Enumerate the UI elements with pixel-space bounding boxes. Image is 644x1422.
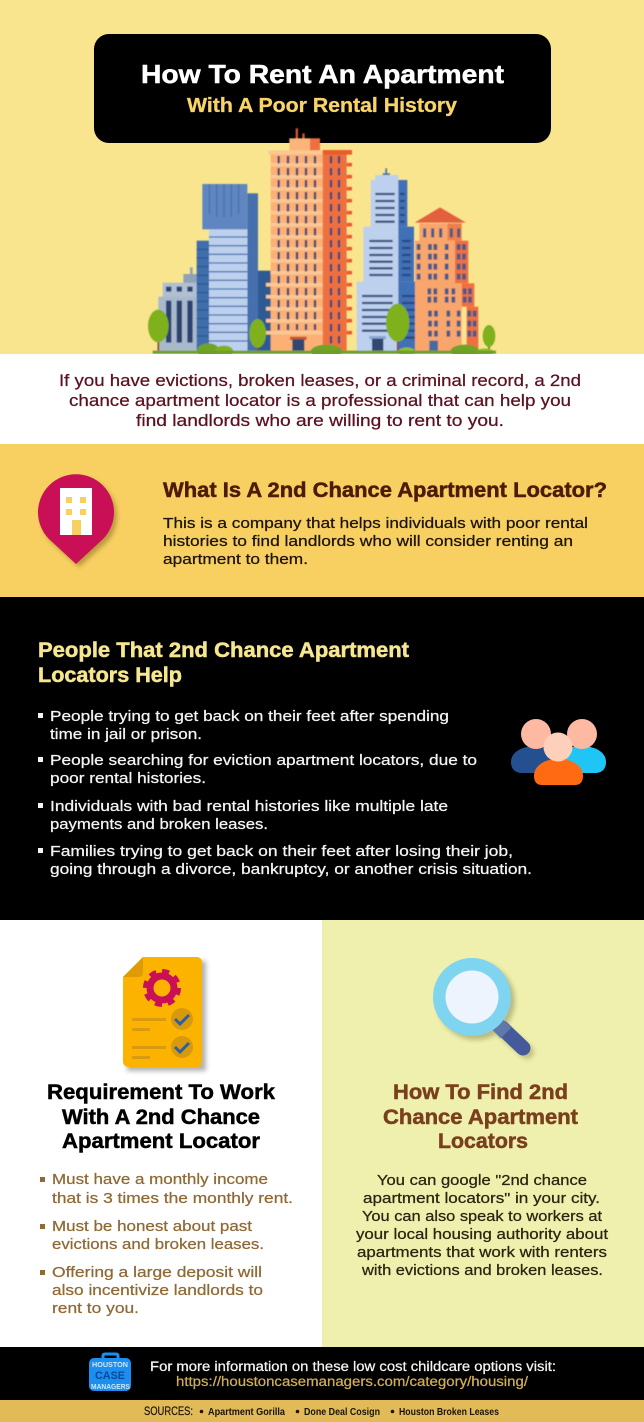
footer text: https://houstoncasemanagers.com/category/housing/ <box>176 1374 528 1389</box>
panel: sources <box>0 1400 644 1422</box>
body text: histories to find landlords who will consider renting an <box>163 533 573 550</box>
panel: footer <box>0 1347 644 1400</box>
heading: Apartment Locator <box>62 1130 260 1153</box>
bullet list: People trying to get back on their feet after spending <box>50 708 449 725</box>
title: How To Rent An Apartment <box>141 59 504 89</box>
body text: apartment locators" in your city. <box>363 1190 600 1207</box>
panel: people helped <box>0 597 644 920</box>
bullet list: poor rental histories. <box>50 770 206 787</box>
sources text: Houston Broken Leases <box>399 1406 499 1418</box>
sources text: Apartment Gorilla <box>208 1406 285 1418</box>
title box <box>94 34 551 143</box>
intro text: If you have evictions, broken leases, or a criminal record, a 2nd <box>59 371 581 390</box>
footer text: For more information on these low cost childcare options visit: <box>150 1359 556 1374</box>
body text: apartments that work with renters <box>357 1244 607 1261</box>
subtitle: With A Poor Rental History <box>187 95 458 117</box>
icon: magnifying glass <box>433 958 527 1052</box>
left grey building <box>158 267 198 351</box>
body text: with evictions and broken leases. <box>361 1262 603 1279</box>
panel: what is a locator <box>0 444 644 597</box>
icon: document with gear <box>123 957 206 1071</box>
icon: location pin <box>38 474 117 567</box>
heading: Requirement To Work <box>47 1081 275 1104</box>
heading: Chance Apartment <box>383 1106 578 1129</box>
bullet list: Families trying to get back on their feet after losing their job, <box>50 843 513 860</box>
bullet list: Offering a large deposit will <box>52 1264 262 1281</box>
bullet list: Individuals with bad rental histories like multiple late <box>50 798 448 815</box>
sources text <box>144 1406 499 1418</box>
body text <box>163 515 588 568</box>
logo: Houston Case Managers <box>89 1354 131 1391</box>
bullet list: Must be honest about past <box>52 1218 253 1235</box>
panel: requirements <box>0 920 322 1347</box>
body text: apartment to them. <box>163 551 308 568</box>
heading <box>47 1081 275 1153</box>
bullet list <box>40 1171 293 1317</box>
heading: Locators Help <box>38 664 182 687</box>
intro text: chance apartment locator is a professional that can help you <box>69 391 571 410</box>
intro text: find landlords who are willing to rent to you. <box>136 411 504 430</box>
bullet list: going through a divorce, bankruptcy, or another crisis situation. <box>50 861 532 878</box>
orange tower <box>266 128 352 351</box>
heading <box>383 1081 578 1153</box>
bullet list: time in jail or prison. <box>50 726 202 743</box>
panel: intro <box>0 354 644 444</box>
trees and bushes <box>148 304 496 358</box>
bullet list: payments and broken leases. <box>50 816 268 833</box>
panel: how to find locators <box>322 920 644 1347</box>
heading: People That 2nd Chance Apartment <box>38 639 409 662</box>
bullet list <box>38 708 532 878</box>
heading: What Is A 2nd Chance Apartment Locator? <box>163 479 607 502</box>
bullet list: Must have a monthly income <box>52 1171 268 1188</box>
red-roof building <box>415 207 478 351</box>
body text: This is a company that helps individuals with poor rental <box>163 515 588 532</box>
heading <box>38 639 409 687</box>
panel: header <box>0 0 644 358</box>
heading: With A 2nd Chance <box>62 1106 260 1129</box>
intro text <box>59 371 581 430</box>
bullet list: that is 3 times the monthly rent. <box>52 1190 293 1207</box>
logo: Houston Case Managers: CASE <box>95 1370 125 1382</box>
body text: You can google "2nd chance <box>377 1172 587 1189</box>
bullet list: rent to you. <box>52 1300 139 1317</box>
bullet list: also incentivize landlords to <box>52 1282 263 1299</box>
logo: Houston Case Managers: MANAGERS <box>91 1384 130 1391</box>
sources text: SOURCES: <box>144 1406 193 1418</box>
illustration: city skyline <box>148 128 496 358</box>
bullet list: People searching for eviction apartment locators, due to <box>50 752 477 769</box>
middle blue building <box>357 168 422 351</box>
heading: How To Find 2nd <box>393 1081 568 1104</box>
icon: group of people <box>511 719 606 785</box>
body text <box>356 1172 609 1279</box>
logo: Houston Case Managers: HOUSTON <box>92 1362 128 1369</box>
blue tower <box>197 184 271 351</box>
footer text <box>150 1359 556 1389</box>
body text: You can also speak to workers at <box>362 1208 603 1225</box>
bullet list: evictions and broken leases. <box>52 1236 264 1253</box>
heading: Locators <box>438 1130 528 1153</box>
sources text: Done Deal Cosign <box>304 1406 380 1418</box>
body text: your local housing authority about <box>356 1226 609 1243</box>
